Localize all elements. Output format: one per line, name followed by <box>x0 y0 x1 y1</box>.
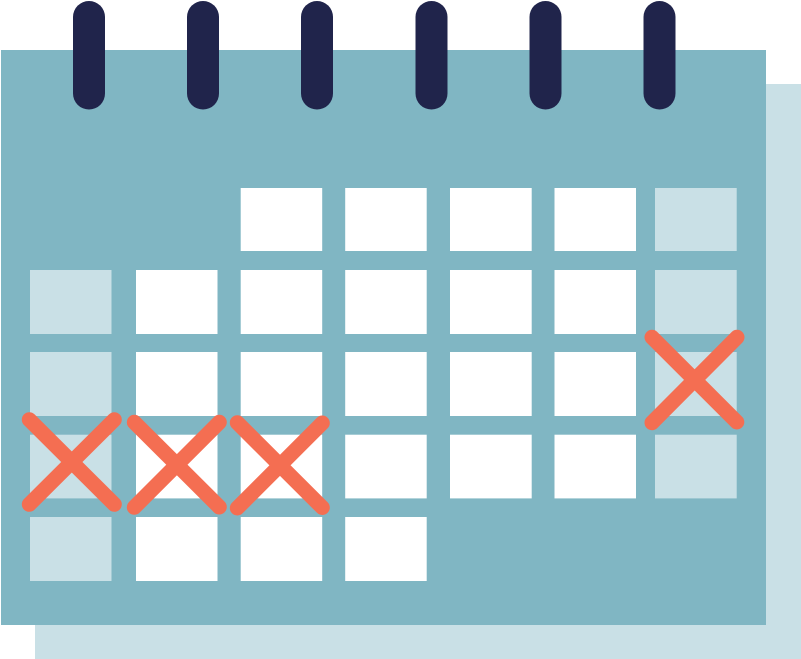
weekend day cells <box>30 188 737 581</box>
spiral binding rings <box>73 1 676 110</box>
red X marks <box>29 337 737 508</box>
weekday cells <box>136 188 636 581</box>
